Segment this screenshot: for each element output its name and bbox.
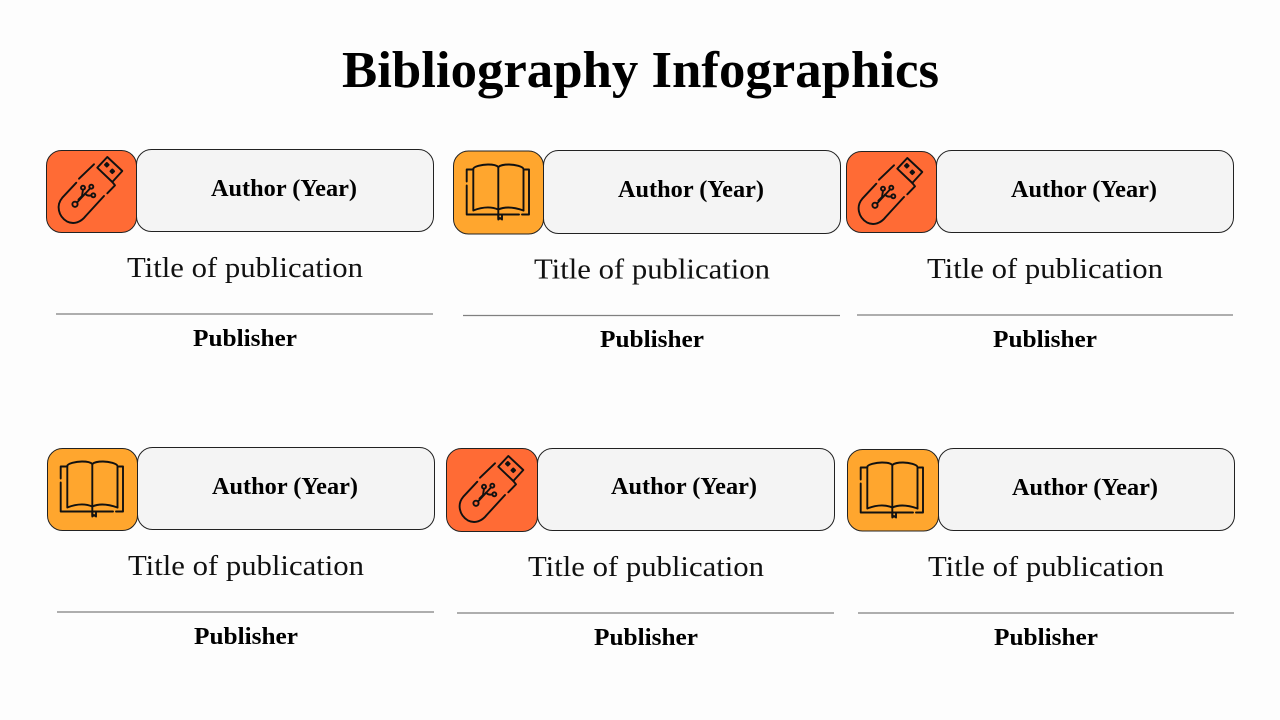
publication title: Title of publication	[127, 252, 364, 284]
icon: USB drive	[46, 150, 136, 232]
publication title: Title of publication	[128, 550, 365, 582]
card 1: top left	[46, 150, 434, 352]
author box	[136, 150, 434, 232]
publisher: Publisher	[193, 326, 297, 352]
card 6: bottom right	[848, 448, 1234, 651]
icon: USB drive	[446, 448, 538, 532]
author label: Author (Year)	[212, 474, 358, 500]
author box	[544, 150, 840, 234]
publisher: Publisher	[194, 624, 298, 650]
card 3: top right	[846, 150, 1234, 353]
author box	[936, 150, 1234, 232]
author box	[138, 448, 434, 530]
publisher: Publisher	[993, 327, 1097, 353]
icon: open book	[848, 450, 938, 531]
icon: open book	[454, 151, 544, 234]
card 5: bottom middle	[446, 448, 834, 651]
publisher: Publisher	[994, 625, 1098, 651]
icon: open book	[48, 448, 138, 530]
author label: Author (Year)	[1011, 177, 1157, 203]
publication title: Title of publication	[528, 551, 765, 583]
author label: Author (Year)	[611, 474, 757, 500]
author label: Author (Year)	[618, 177, 764, 203]
publisher: Publisher	[600, 327, 704, 353]
publisher: Publisher	[594, 625, 698, 651]
icon: USB drive	[846, 152, 936, 232]
title: Bibliography Infographics	[342, 42, 939, 99]
card 2: top middle	[454, 150, 840, 353]
publication title: Title of publication	[534, 254, 771, 286]
publication title: Title of publication	[928, 551, 1165, 583]
author label: Author (Year)	[1012, 475, 1158, 501]
author label: Author (Year)	[211, 176, 357, 202]
card 4: bottom left	[48, 448, 434, 650]
publication title: Title of publication	[927, 253, 1164, 285]
author box	[538, 448, 834, 530]
author box	[938, 448, 1234, 530]
